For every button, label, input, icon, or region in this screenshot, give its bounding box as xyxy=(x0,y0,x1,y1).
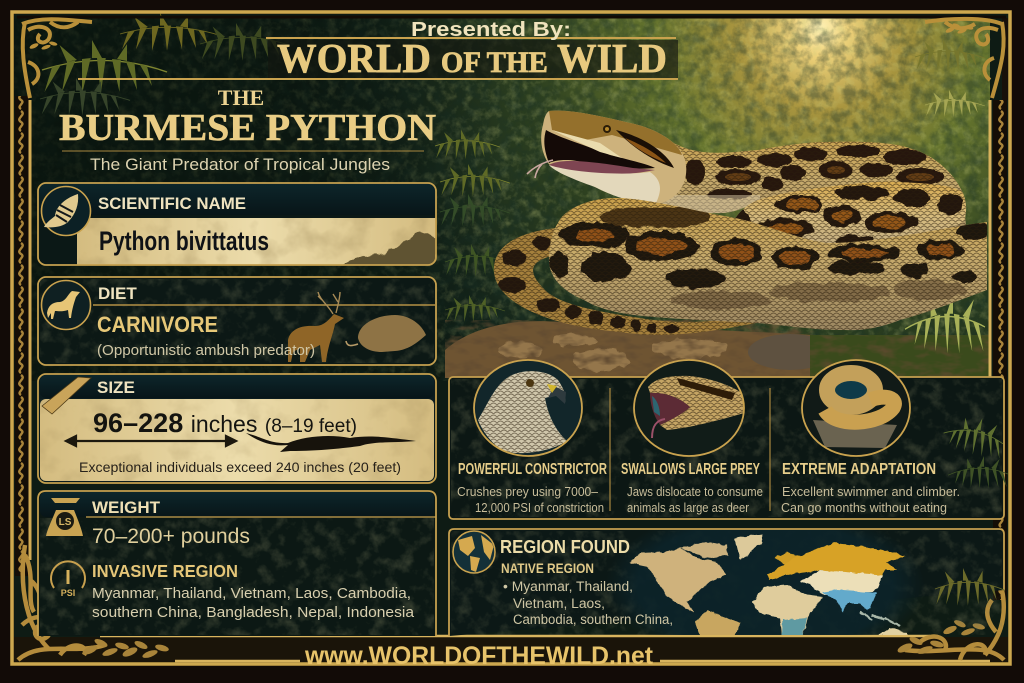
label: DIET xyxy=(98,284,137,303)
illustration: rodent xyxy=(346,315,426,352)
list: invasive countries: Myanmar, Thailand, Vietnam, Laos, Cambodia, xyxy=(92,585,411,602)
label: native region: NATIVE REGION xyxy=(501,560,594,576)
title: THE: THE xyxy=(218,85,264,110)
label: region found: REGION FOUND xyxy=(500,537,630,557)
North America xyxy=(629,548,727,612)
panel: scientific name xyxy=(38,183,436,266)
world map xyxy=(620,530,910,635)
feature: extreme adaptation: EXTREME ADAPTATION xyxy=(782,461,936,478)
icon: eagle portrait xyxy=(474,360,582,456)
panel: size xyxy=(38,374,436,483)
header: WORLD OF THE WILD: WORLD OF THE WILD xyxy=(277,35,667,81)
note: (Opportunistic ambush predator) xyxy=(97,342,315,359)
header: Presented By: Presented By: xyxy=(411,19,571,41)
illustration: deer xyxy=(288,292,344,362)
header banner backing xyxy=(268,40,678,78)
list: native countries: Cambodia, southern China, xyxy=(513,612,673,627)
title: Burmese Python: BURMESE PYTHON xyxy=(59,107,436,149)
label: invasive region: INVASIVE REGION xyxy=(92,561,238,581)
corner ornament: bottom right xyxy=(896,590,1004,660)
arrow: length span xyxy=(66,436,236,446)
Africa xyxy=(752,585,823,636)
illustration: coiled Burmese python xyxy=(490,111,990,340)
icon: PSI gauge: PSI xyxy=(61,588,75,598)
feature: powerful constrictor: 12,000 PSI of constriction xyxy=(475,501,604,515)
list: native countries: • Myanmar, Thailand, xyxy=(503,579,633,594)
South Asia blue xyxy=(822,590,878,612)
value: Python bivittatus xyxy=(99,226,269,256)
icon: scale: LS xyxy=(59,517,72,528)
corner ornament: top right xyxy=(925,19,1004,98)
value: weight: 70–200+ pounds xyxy=(92,525,250,548)
icon: ruler xyxy=(42,377,91,414)
icon: coiled python xyxy=(802,360,910,456)
measurement: 96–228 inches (8–19 feet) xyxy=(93,408,357,438)
python silhouette xyxy=(246,433,416,452)
panel: region found xyxy=(448,528,1006,636)
python head with open mouth xyxy=(527,111,686,205)
foliage in region panel xyxy=(935,568,1005,606)
feature: swallows large prey: SWALLOWS LARGE PREY xyxy=(621,461,760,478)
value: CARNIVORE xyxy=(97,312,218,337)
icon: globe xyxy=(453,531,495,573)
label: SIZE xyxy=(97,378,135,397)
Eurasia gold north xyxy=(768,543,905,580)
label: weight: WEIGHT xyxy=(92,498,161,517)
list: native countries xyxy=(503,579,673,627)
panel: diet xyxy=(38,277,436,365)
icon: python open mouth xyxy=(634,360,744,456)
header rules xyxy=(78,38,678,79)
footer band xyxy=(14,637,1008,663)
title underline xyxy=(62,150,424,152)
list: invasive countries: southern China, Bangladesh, Nepal, Indonesia xyxy=(92,604,415,621)
panel: weight and invasive region xyxy=(38,491,436,636)
corner ornament: top left xyxy=(22,19,92,98)
parchment xyxy=(40,399,434,481)
Asia cream xyxy=(800,570,883,595)
list: native countries: Vietnam, Laos, xyxy=(513,596,605,611)
feature: swallows large prey: Jaws dislocate to consume xyxy=(627,485,763,499)
feature: powerful constrictor: Crushes prey using 7000– xyxy=(457,485,598,499)
icon: scale xyxy=(46,498,83,536)
corner ornament: bottom left xyxy=(18,545,170,660)
python second coil xyxy=(736,182,966,243)
Arctic islands xyxy=(680,542,728,558)
feature: swallows large prey: animals as large as deer xyxy=(627,501,749,515)
footer URL: www.WORLDOFTHEWILD.net xyxy=(304,642,654,670)
icon: PSI gauge xyxy=(51,561,85,598)
panel: features xyxy=(449,360,1008,519)
python main body xyxy=(545,195,990,335)
python neck and upper body xyxy=(601,142,966,229)
feature: powerful constrictor: POWERFUL CONSTRICTOR xyxy=(458,461,607,478)
feature: powerful constrictor xyxy=(457,461,607,515)
label: SCIENTIFIC NAME xyxy=(98,194,246,213)
list: invasive countries xyxy=(92,585,415,621)
feature: extreme adaptation xyxy=(781,461,960,515)
subtitle: The Giant Predator of Tropical Jungles xyxy=(90,155,390,174)
feature: extreme adaptation: Can go months without eating xyxy=(781,501,947,515)
Greenland xyxy=(735,534,763,560)
icon: DNA fish xyxy=(42,186,90,236)
Indonesia and Australia xyxy=(860,612,900,626)
landscape vignette xyxy=(340,232,436,266)
python tail coil xyxy=(494,228,756,335)
feature: extreme adaptation: Excellent swimmer and climber. xyxy=(782,485,960,499)
feature: swallows large prey xyxy=(621,461,763,515)
footer rules xyxy=(100,636,990,661)
foliage: right-edge fern xyxy=(941,411,1008,488)
note: Exceptional individuals exceed 240 inches (20 feet) xyxy=(79,459,401,475)
Scandinavia and Europe xyxy=(774,552,799,565)
icon: goat xyxy=(42,280,90,330)
parchment strip xyxy=(77,218,436,266)
South America xyxy=(695,610,740,636)
